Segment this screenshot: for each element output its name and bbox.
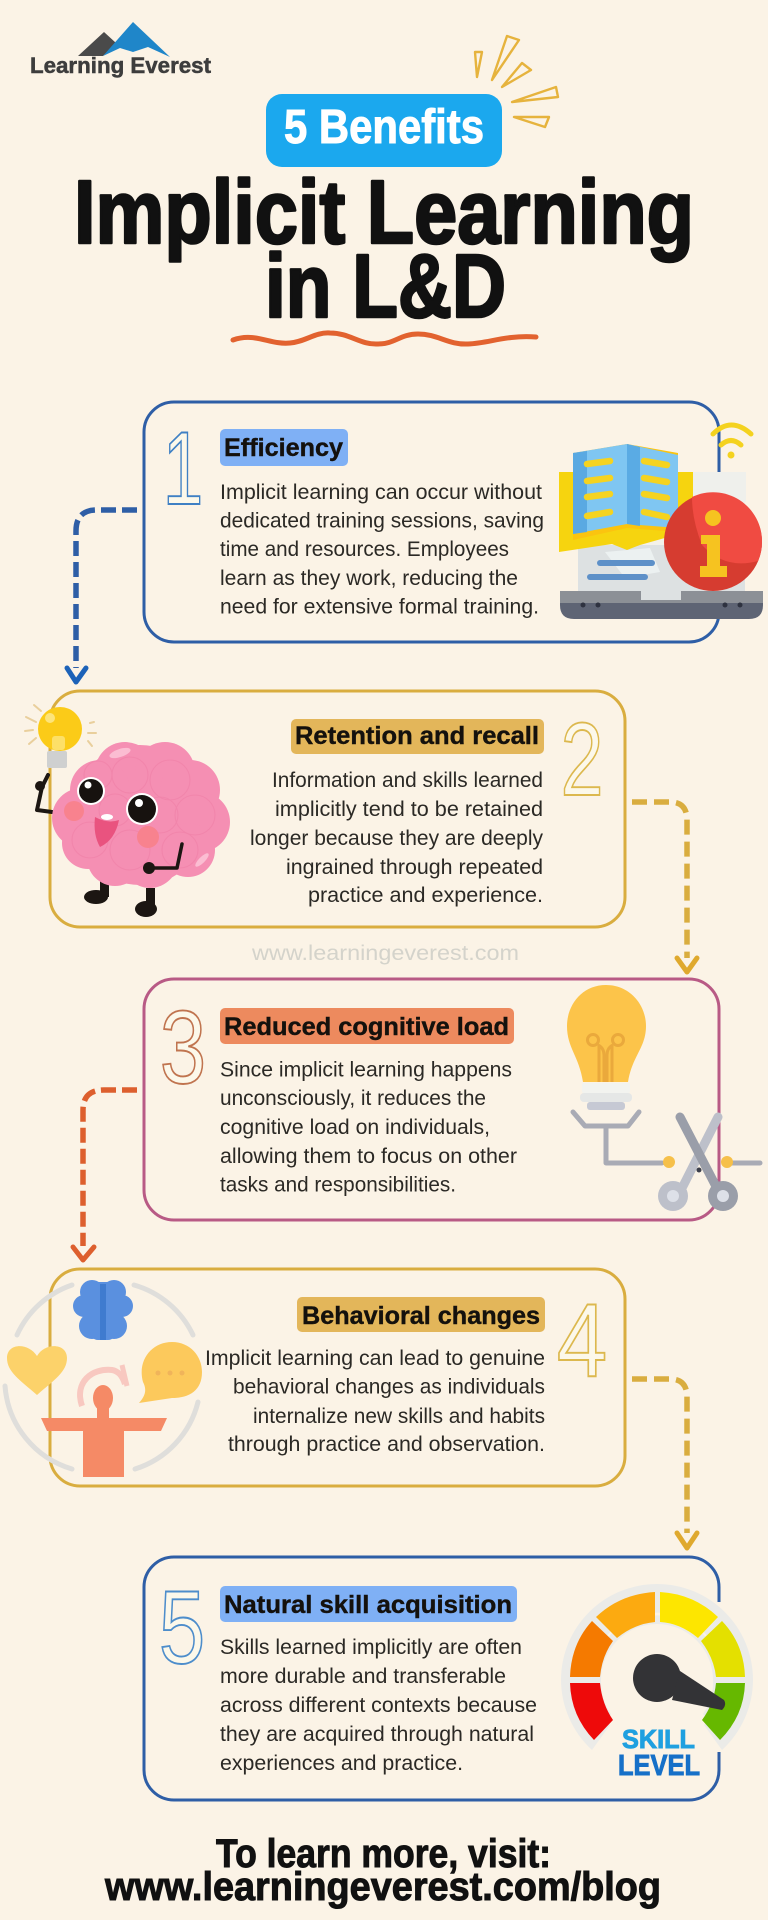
body text: efficiency: learn as they work, reducing the <box>220 567 518 590</box>
body text: retention and recall <box>250 769 543 907</box>
number 3: 3 <box>160 989 206 1105</box>
badge: 5 Benefits: 5 Benefits <box>284 101 484 154</box>
title underline squiggle <box>233 333 536 344</box>
arrow: card 3 to card 4 <box>73 1090 137 1260</box>
body text: retention and recall: Information and skills learned <box>272 769 543 792</box>
footer call to action: www.learningeverest.com/blog <box>104 1865 661 1909</box>
badge: 5 Benefits <box>266 94 502 167</box>
body text: retention and recall: ingrained through repeated <box>286 856 543 879</box>
body text: efficiency: Implicit learning can occur without <box>220 481 542 504</box>
body text: natural skill acquisition: they are acquired through natural <box>220 1723 534 1746</box>
body text: efficiency <box>220 481 544 618</box>
body text: reduced cognitive load <box>220 1058 517 1196</box>
body text: efficiency: need for extensive formal training. <box>220 596 539 618</box>
logo: Learning Everest <box>30 22 212 78</box>
body text: reduced cognitive load: tasks and responsibilities. <box>220 1174 456 1196</box>
gauge: skill level <box>561 1584 753 1782</box>
body text: behavioral changes: Implicit learning can lead to genuine <box>205 1347 545 1370</box>
panel: retention and recall <box>25 691 625 927</box>
gauge: skill level: LEVEL <box>618 1750 700 1782</box>
body text: retention and recall: practice and experience. <box>308 884 543 907</box>
body text: behavioral changes <box>205 1347 545 1456</box>
panel: behavioral changes <box>5 1269 625 1486</box>
body text: natural skill acquisition <box>220 1636 537 1775</box>
heading: reduced cognitive load: Reduced cognitive load <box>224 1013 509 1041</box>
body text: behavioral changes: internalize new skills and habits <box>253 1405 545 1428</box>
logo: Learning Everest: Learning Everest <box>30 53 212 78</box>
heading: efficiency: Efficiency <box>224 434 343 462</box>
number 5: 5 <box>159 1569 205 1685</box>
title <box>74 163 694 337</box>
body text: reduced cognitive load: unconsciously, it reduces the <box>220 1087 486 1110</box>
icon: sunburst accent <box>475 36 558 127</box>
body text: natural skill acquisition: Skills learned implicitly are often <box>220 1636 522 1659</box>
heading: natural skill acquisition: Natural skill acquisition <box>224 1591 512 1619</box>
body text: reduced cognitive load: Since implicit learning happens <box>220 1058 512 1082</box>
body text: retention and recall: longer because they are deeply <box>250 827 543 850</box>
arrow: card 4 to card 5 <box>632 1379 697 1548</box>
body text: natural skill acquisition: across different contexts because <box>220 1694 537 1717</box>
number 2: 2 <box>561 702 603 818</box>
panel: efficiency <box>144 402 763 642</box>
body text: behavioral changes: behavioral changes as individuals <box>233 1376 545 1398</box>
body text: reduced cognitive load: cognitive load on individuals, <box>220 1116 490 1139</box>
title: in L&D <box>265 237 506 337</box>
heading: behavioral changes: Behavioral changes <box>302 1302 540 1330</box>
number 1: 1 <box>163 411 203 527</box>
body text: behavioral changes: through practice and observation. <box>228 1433 545 1456</box>
number 4: 4 <box>557 1282 607 1398</box>
panel: reduced cognitive load <box>144 979 760 1220</box>
icon: open book on laptop with info badge and wifi <box>559 425 763 619</box>
heading: efficiency <box>220 429 348 466</box>
icon: light bulb with cord and scissors <box>567 985 760 1211</box>
body text: efficiency: time and resources. Employees <box>220 538 509 561</box>
icon: person with brain, heart and speech bubble <box>5 1280 202 1477</box>
arrow: card 1 to card 2 <box>67 510 137 682</box>
footer call to action: To learn more, visit: <box>216 1832 551 1876</box>
panel: natural skill acquisition <box>144 1557 753 1800</box>
body text: natural skill acquisition: experiences and practice. <box>220 1752 463 1775</box>
heading: retention and recall: Retention and recall <box>295 722 539 750</box>
body text: natural skill acquisition: more durable and transferable <box>220 1665 506 1688</box>
body text: retention and recall: implicitly tend to be retained <box>275 798 543 821</box>
icon: happy brain with light bulb <box>25 705 230 917</box>
footer call to action <box>104 1832 661 1909</box>
watermark: www.learningeverest.com <box>251 942 519 965</box>
body text: reduced cognitive load: allowing them to focus on other <box>220 1145 517 1168</box>
body text: efficiency: dedicated training sessions, saving <box>220 510 544 532</box>
arrow: card 2 to card 3 <box>632 802 697 972</box>
gauge: skill level: SKILL <box>622 1724 695 1754</box>
